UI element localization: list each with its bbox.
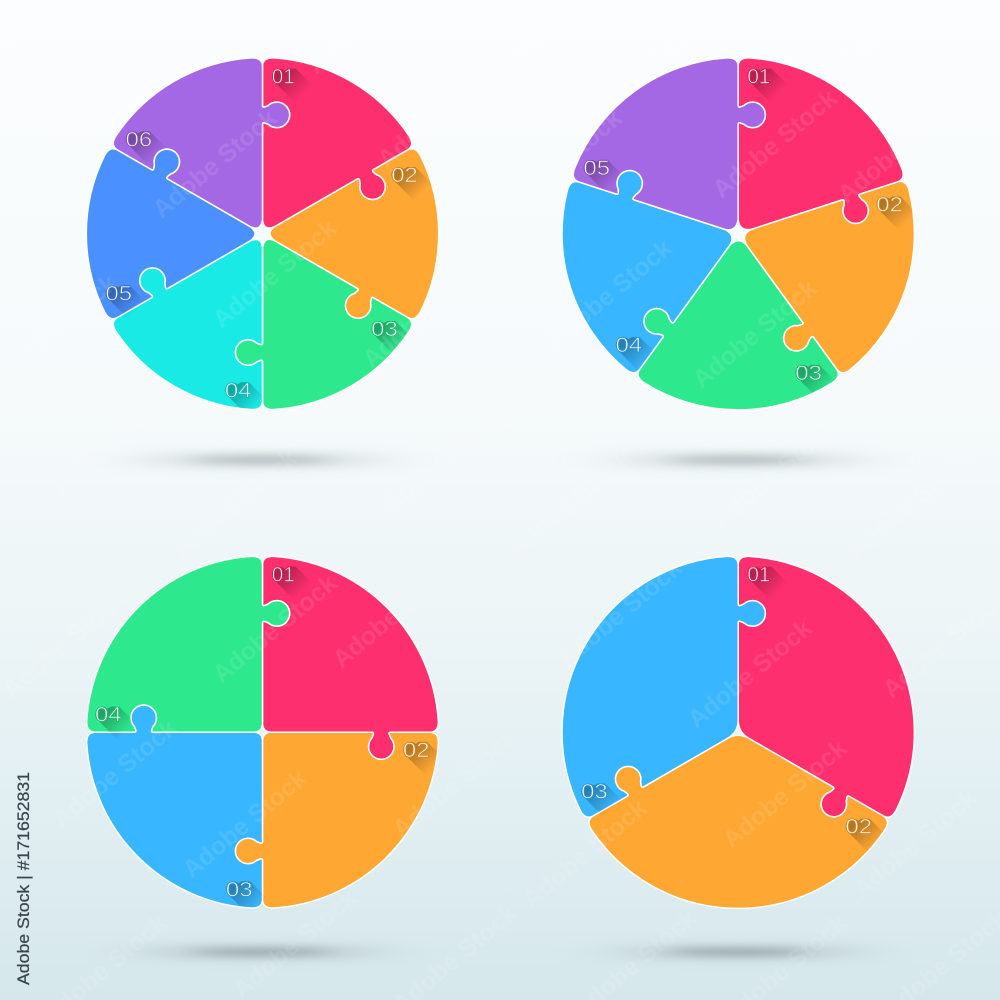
number 01: 01 <box>747 564 770 587</box>
watermark pattern: Adobe Stock <box>502 444 637 564</box>
chart: five piece puzzle circle <box>562 58 914 410</box>
watermark pattern: Adobe Stock <box>542 234 677 354</box>
stock image credit, vertical text: Adobe Stock | #171652831 <box>15 772 33 985</box>
piece 02 orange <box>267 146 489 360</box>
number 03: 03 <box>226 878 253 901</box>
number 02: 02 <box>403 739 430 762</box>
number 05 <box>584 160 622 191</box>
number 02: 02 <box>845 816 872 839</box>
number 03: 03 <box>371 318 398 341</box>
watermark pattern: Adobe Stock <box>832 89 967 209</box>
number 03 <box>581 784 619 815</box>
number 01 <box>748 566 786 598</box>
piece 02 orange <box>742 179 956 389</box>
ground shadow: top left <box>132 454 392 466</box>
number 06 <box>126 131 163 162</box>
piece 03 green <box>193 237 415 451</box>
piece 01 pink <box>262 58 412 228</box>
number 01 <box>748 68 786 100</box>
watermark pattern: Adobe Stock <box>147 104 282 224</box>
watermark pattern: Adobe Stock <box>517 794 652 914</box>
piece 01 pink <box>738 556 914 817</box>
watermark pattern: Adobe Stock <box>717 734 852 854</box>
number 05: 05 <box>105 282 132 305</box>
piece 04 cyan <box>113 239 262 410</box>
number 02 <box>391 167 429 198</box>
number 02 <box>846 818 882 850</box>
ground shadow: top right <box>608 454 868 466</box>
chart: three piece puzzle circle <box>561 556 915 910</box>
piece 02 orange <box>235 732 438 908</box>
ground shadow: bottom left <box>132 946 392 958</box>
number 04 <box>225 382 263 408</box>
watermark pattern: Adobe Stock <box>847 784 982 904</box>
piece 06 purple <box>110 17 332 231</box>
piece 01 pink <box>738 58 903 230</box>
piece 05 purple <box>571 22 785 232</box>
watermark pattern: Adobe Stock <box>682 614 817 734</box>
number 02 <box>876 196 912 228</box>
watermark pattern: Adobe Stock <box>47 714 182 834</box>
number 05 <box>106 285 144 316</box>
watermark pattern: Adobe Stock <box>327 554 462 674</box>
number 03: 03 <box>795 362 822 385</box>
watermark pattern: Adobe Stock <box>47 379 182 499</box>
number 04: 04 <box>95 704 122 727</box>
watermark pattern: Adobe Stock <box>707 414 842 534</box>
watermark pattern: Adobe Stock <box>0 584 132 704</box>
number 02 <box>403 742 437 773</box>
number 03 <box>795 364 833 393</box>
watermark pattern: Adobe Stock <box>207 214 342 334</box>
watermark pattern: Adobe Stock <box>492 104 627 224</box>
piece 03 sky blue <box>87 705 262 908</box>
watermark pattern: Adobe Stock <box>167 444 302 564</box>
chart: four piece puzzle circle <box>87 556 452 920</box>
number 01: 01 <box>272 564 295 587</box>
watermark pattern: Adobe Stock <box>372 54 507 174</box>
number 04 <box>95 706 133 738</box>
number 04: 04 <box>225 379 252 402</box>
number 06: 06 <box>125 128 152 151</box>
chart: six piece puzzle circle <box>87 58 438 410</box>
number 01: 01 <box>747 66 770 89</box>
watermark pattern: Adobe Stock <box>207 569 342 689</box>
piece 04 green <box>87 556 290 732</box>
piece 04 sky blue <box>501 140 736 376</box>
number 03 <box>226 881 264 908</box>
number 02: 02 <box>876 194 903 217</box>
watermark pattern: Adobe Stock <box>552 554 687 674</box>
watermark pattern: Adobe Stock <box>32 59 167 179</box>
piece 03 sky blue <box>498 537 812 820</box>
piece 03 green <box>607 237 842 473</box>
piece 05 blue <box>36 107 258 322</box>
watermark pattern: Adobe Stock <box>842 444 977 564</box>
number 01: 01 <box>272 66 295 89</box>
watermark pattern: Adobe Stock <box>177 764 312 884</box>
number 01 <box>272 68 310 100</box>
number 05: 05 <box>583 157 610 180</box>
watermark pattern: Adobe Stock <box>377 399 512 519</box>
number 03 <box>371 321 407 352</box>
ground shadow: bottom right <box>608 946 868 958</box>
watermark pattern: Adobe Stock <box>357 254 492 374</box>
number 03: 03 <box>581 781 608 804</box>
number 04 <box>616 337 654 368</box>
watermark pattern: Adobe Stock <box>707 84 842 204</box>
watermark pattern: Adobe Stock <box>387 724 522 844</box>
number 02: 02 <box>391 164 418 187</box>
watermark pattern: Adobe Stock <box>687 274 822 394</box>
number 01 <box>272 566 310 598</box>
number 04: 04 <box>616 334 643 357</box>
piece 02 orange <box>576 690 891 973</box>
piece 01 pink <box>262 556 438 759</box>
